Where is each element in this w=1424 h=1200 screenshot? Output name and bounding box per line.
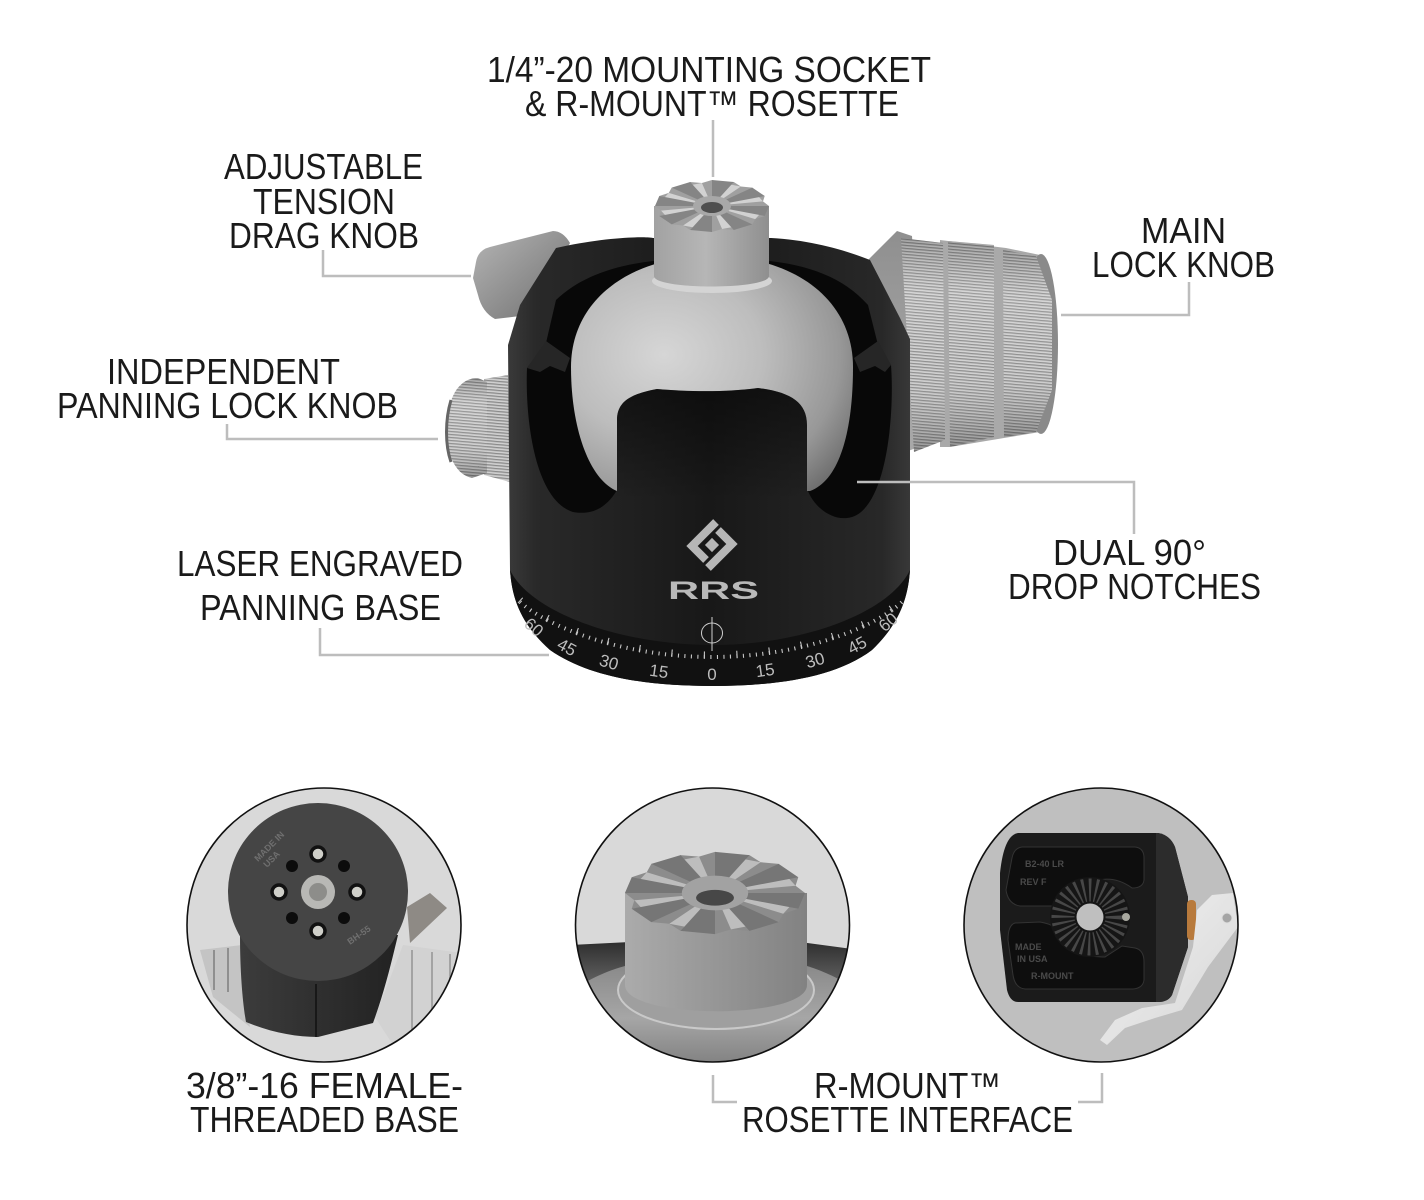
- plate engraved text: [1015, 859, 1074, 981]
- panning scale: 45: [844, 633, 870, 658]
- label: panning base: [177, 543, 549, 655]
- RRS logo: [668, 522, 759, 605]
- body: [240, 935, 398, 1037]
- screws: [272, 847, 364, 938]
- circle: rosette detail: [570, 788, 860, 1070]
- plate engraved text: REV F: [1020, 877, 1047, 887]
- engraved text: [252, 829, 372, 947]
- label: rosette interface: [713, 1065, 1102, 1140]
- front tab: [617, 388, 807, 500]
- label: main lock knob: [1061, 210, 1275, 315]
- panning scale: 60: [520, 614, 547, 641]
- panning scale: 60: [875, 609, 902, 636]
- label: drop notches: DROP NOTCHES: [1008, 566, 1261, 607]
- ball cavity and drop notches: [527, 258, 892, 518]
- label: tension drag knob: TENSION: [253, 181, 395, 222]
- label: tension drag knob: ADJUSTABLE: [224, 146, 423, 187]
- holes: [286, 860, 350, 924]
- RRS logo: RRS: [668, 577, 759, 605]
- laser engraved base ring: [510, 570, 910, 686]
- label: mounting socket: & R-MOUNT™ ROSETTE: [525, 83, 899, 124]
- label: panning lock knob: [57, 351, 438, 439]
- engraved text: MADE IN: [252, 829, 286, 863]
- mounting post: [652, 206, 772, 293]
- label: drop notches: DUAL 90°: [1053, 532, 1206, 573]
- circle: R-mount plate detail: [964, 788, 1238, 1062]
- independent panning lock knob: [446, 375, 510, 482]
- lever rivet: [1222, 914, 1232, 922]
- lower recess: [1008, 922, 1144, 989]
- dark shoulder band: [578, 942, 847, 981]
- right silver knob: [411, 950, 451, 1030]
- label: panning lock knob: INDEPENDENT: [107, 351, 340, 392]
- silver ball: [571, 256, 853, 491]
- panning scale: 30: [597, 651, 621, 674]
- panning scale: 0: [707, 665, 717, 684]
- flange: [617, 974, 815, 1030]
- left silver knob: [200, 945, 250, 1027]
- circle: threaded base detail: [187, 788, 465, 1062]
- label: mounting socket: 1/4”-20 MOUNTING SOCKET: [487, 49, 931, 90]
- rosette teeth: [1050, 877, 1130, 957]
- plate engraved text: B2-40 LR: [1025, 859, 1065, 869]
- body wedge left between cavity and notch: [527, 341, 570, 372]
- rosette teeth: [625, 852, 805, 934]
- panning scale: 45: [554, 635, 580, 660]
- panning scale: 15: [754, 660, 776, 681]
- panning scale: 15: [648, 661, 670, 682]
- label: rosette interface: R-MOUNT™: [814, 1065, 1001, 1106]
- label: rosette interface: ROSETTE INTERFACE: [742, 1099, 1073, 1140]
- adjustable tension drag knob: [473, 231, 570, 319]
- plate engraved text: MADE: [1015, 942, 1042, 952]
- post: [625, 893, 807, 1011]
- label: panning base: PANNING BASE: [200, 587, 441, 628]
- plate engraved text: IN USA: [1017, 954, 1048, 964]
- central threaded socket: [301, 875, 335, 909]
- panning scale: 30: [803, 649, 827, 672]
- upper recess: [1006, 847, 1144, 906]
- lever: [407, 893, 447, 943]
- label: main lock knob: LOCK KNOB: [1092, 244, 1275, 285]
- plate end block: [1156, 833, 1188, 1002]
- main product: ball head: [446, 180, 1058, 686]
- infographic canvas: [60, 56, 1274, 1132]
- base disc: [228, 803, 408, 981]
- black body with shoulders: [508, 237, 910, 686]
- label: threaded base: THREADED BASE: [190, 1099, 459, 1140]
- panning scale: [520, 598, 904, 684]
- top rosette: [655, 180, 769, 232]
- seam: [315, 984, 317, 1037]
- plate: [1000, 833, 1188, 1002]
- body wedge right between cavity and notch: [854, 341, 891, 372]
- label: panning base: LASER ENGRAVED: [177, 543, 463, 584]
- silver lever: [1100, 893, 1238, 1045]
- label: tension drag knob: DRAG KNOB: [229, 215, 419, 256]
- label: panning lock knob: PANNING LOCK KNOB: [57, 385, 398, 426]
- label: threaded base: 3/8”-16 FEMALE-: [186, 1065, 463, 1106]
- main lock knob: [866, 231, 1058, 456]
- plate engraved text: R-MOUNT: [1031, 971, 1074, 981]
- ball surface: [588, 966, 838, 1062]
- bronze pin: [1187, 900, 1196, 940]
- label: tension drag knob: [224, 146, 471, 276]
- label: main lock knob: MAIN: [1141, 210, 1226, 251]
- engraved text: BH-55: [345, 924, 372, 947]
- label: mounting socket: [487, 49, 931, 177]
- label: drop notches: [857, 482, 1261, 607]
- label: threaded base: [186, 1065, 463, 1140]
- engraved text: USA: [261, 849, 282, 869]
